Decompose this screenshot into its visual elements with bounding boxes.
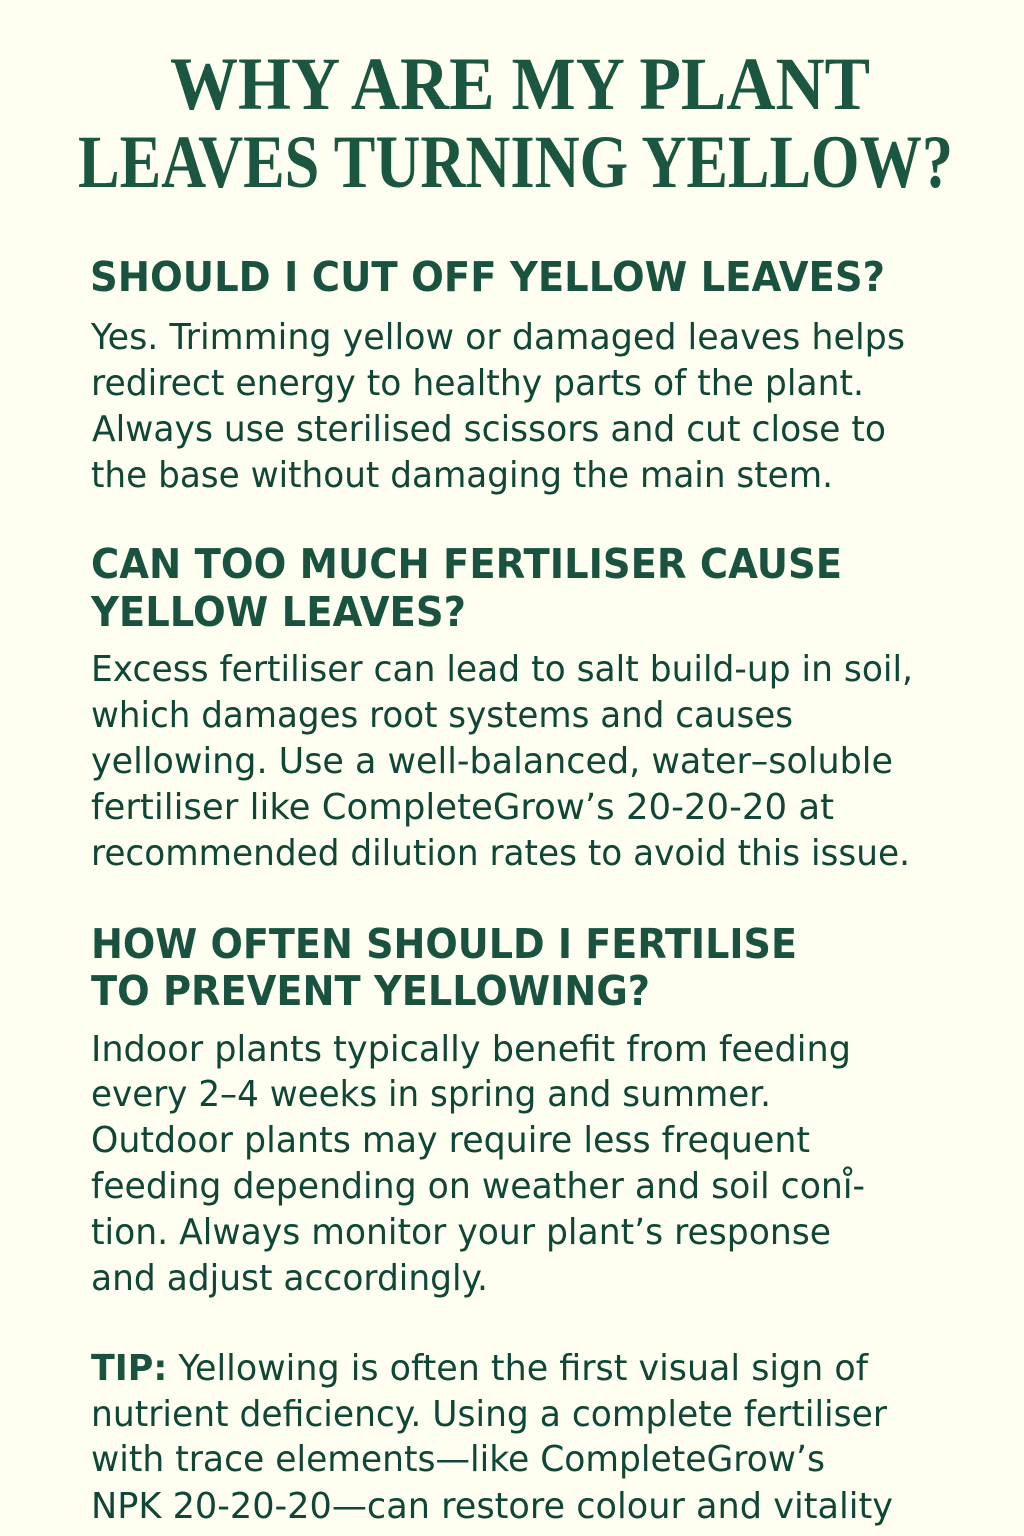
text block: fertiliser answer: which damages root systems and causes xyxy=(91,695,793,736)
text block: feeding frequency answer: tion. Always monitor your plant’s response xyxy=(91,1212,831,1253)
text block: feeding frequency answer xyxy=(91,1029,865,1299)
tip callout: nutrient deficiency. Using a complete fertiliser xyxy=(91,1394,887,1435)
heading: how often to fertilise xyxy=(91,920,797,1015)
text block: feeding frequency answer: Outdoor plants may require less frequent xyxy=(91,1120,810,1161)
text block: fertiliser answer xyxy=(91,649,913,874)
heading: too much fertiliser: YELLOW LEAVES? xyxy=(90,588,466,636)
text block: feeding frequency answer: every 2–4 weeks in spring and summer. xyxy=(91,1074,771,1115)
heading: how often to fertilise: HOW OFTEN SHOULD I FERTILISE xyxy=(91,920,797,968)
text block: trimming answer xyxy=(90,317,905,496)
tip callout: TIP: Yellowing is often the first visual sign of xyxy=(91,1348,869,1389)
text block: fertiliser answer: yellowing. Use a well-balanced, water–soluble xyxy=(91,741,893,782)
heading: too much fertiliser: CAN TOO MUCH FERTILISER CAUSE xyxy=(91,540,842,588)
title xyxy=(78,43,953,204)
tip callout: with trace elements—like CompleteGrow’s xyxy=(91,1439,825,1480)
text block: feeding frequency answer: feeding depending on weather and soil coni̊- xyxy=(91,1166,865,1207)
text block: feeding frequency answer: and adjust accordingly. xyxy=(91,1258,488,1299)
text block: trimming answer: Always use sterilised scissors and cut close to xyxy=(92,409,886,450)
text block: feeding frequency answer: Indoor plants typically benefit from feeding xyxy=(91,1029,851,1070)
heading: how often to fertilise: TO PREVENT YELLOWING? xyxy=(91,967,650,1015)
text block: trimming answer: Yes. Trimming yellow or damaged leaves helps xyxy=(90,317,905,358)
text block: trimming answer: redirect energy to healthy parts of the plant. xyxy=(91,363,864,404)
text block: trimming answer: the base without damaging the main stem. xyxy=(91,455,833,496)
text block: fertiliser answer: recommended dilution rates to avoid this issue. xyxy=(91,833,910,874)
text block: fertiliser answer: fertiliser like CompleteGrow’s 20-20-20 at xyxy=(91,787,834,828)
tip callout xyxy=(91,1348,893,1527)
text block: fertiliser answer: Excess fertiliser can lead to salt build-up in soil, xyxy=(91,649,913,690)
title: WHY ARE MY PLANT xyxy=(170,43,870,126)
heading: too much fertiliser xyxy=(90,540,842,636)
tip callout: NPK 20-20-20—can restore colour and vitality xyxy=(91,1486,893,1527)
heading: should I cut off yellow leaves: SHOULD I CUT OFF YELLOW LEAVES? xyxy=(90,253,885,301)
